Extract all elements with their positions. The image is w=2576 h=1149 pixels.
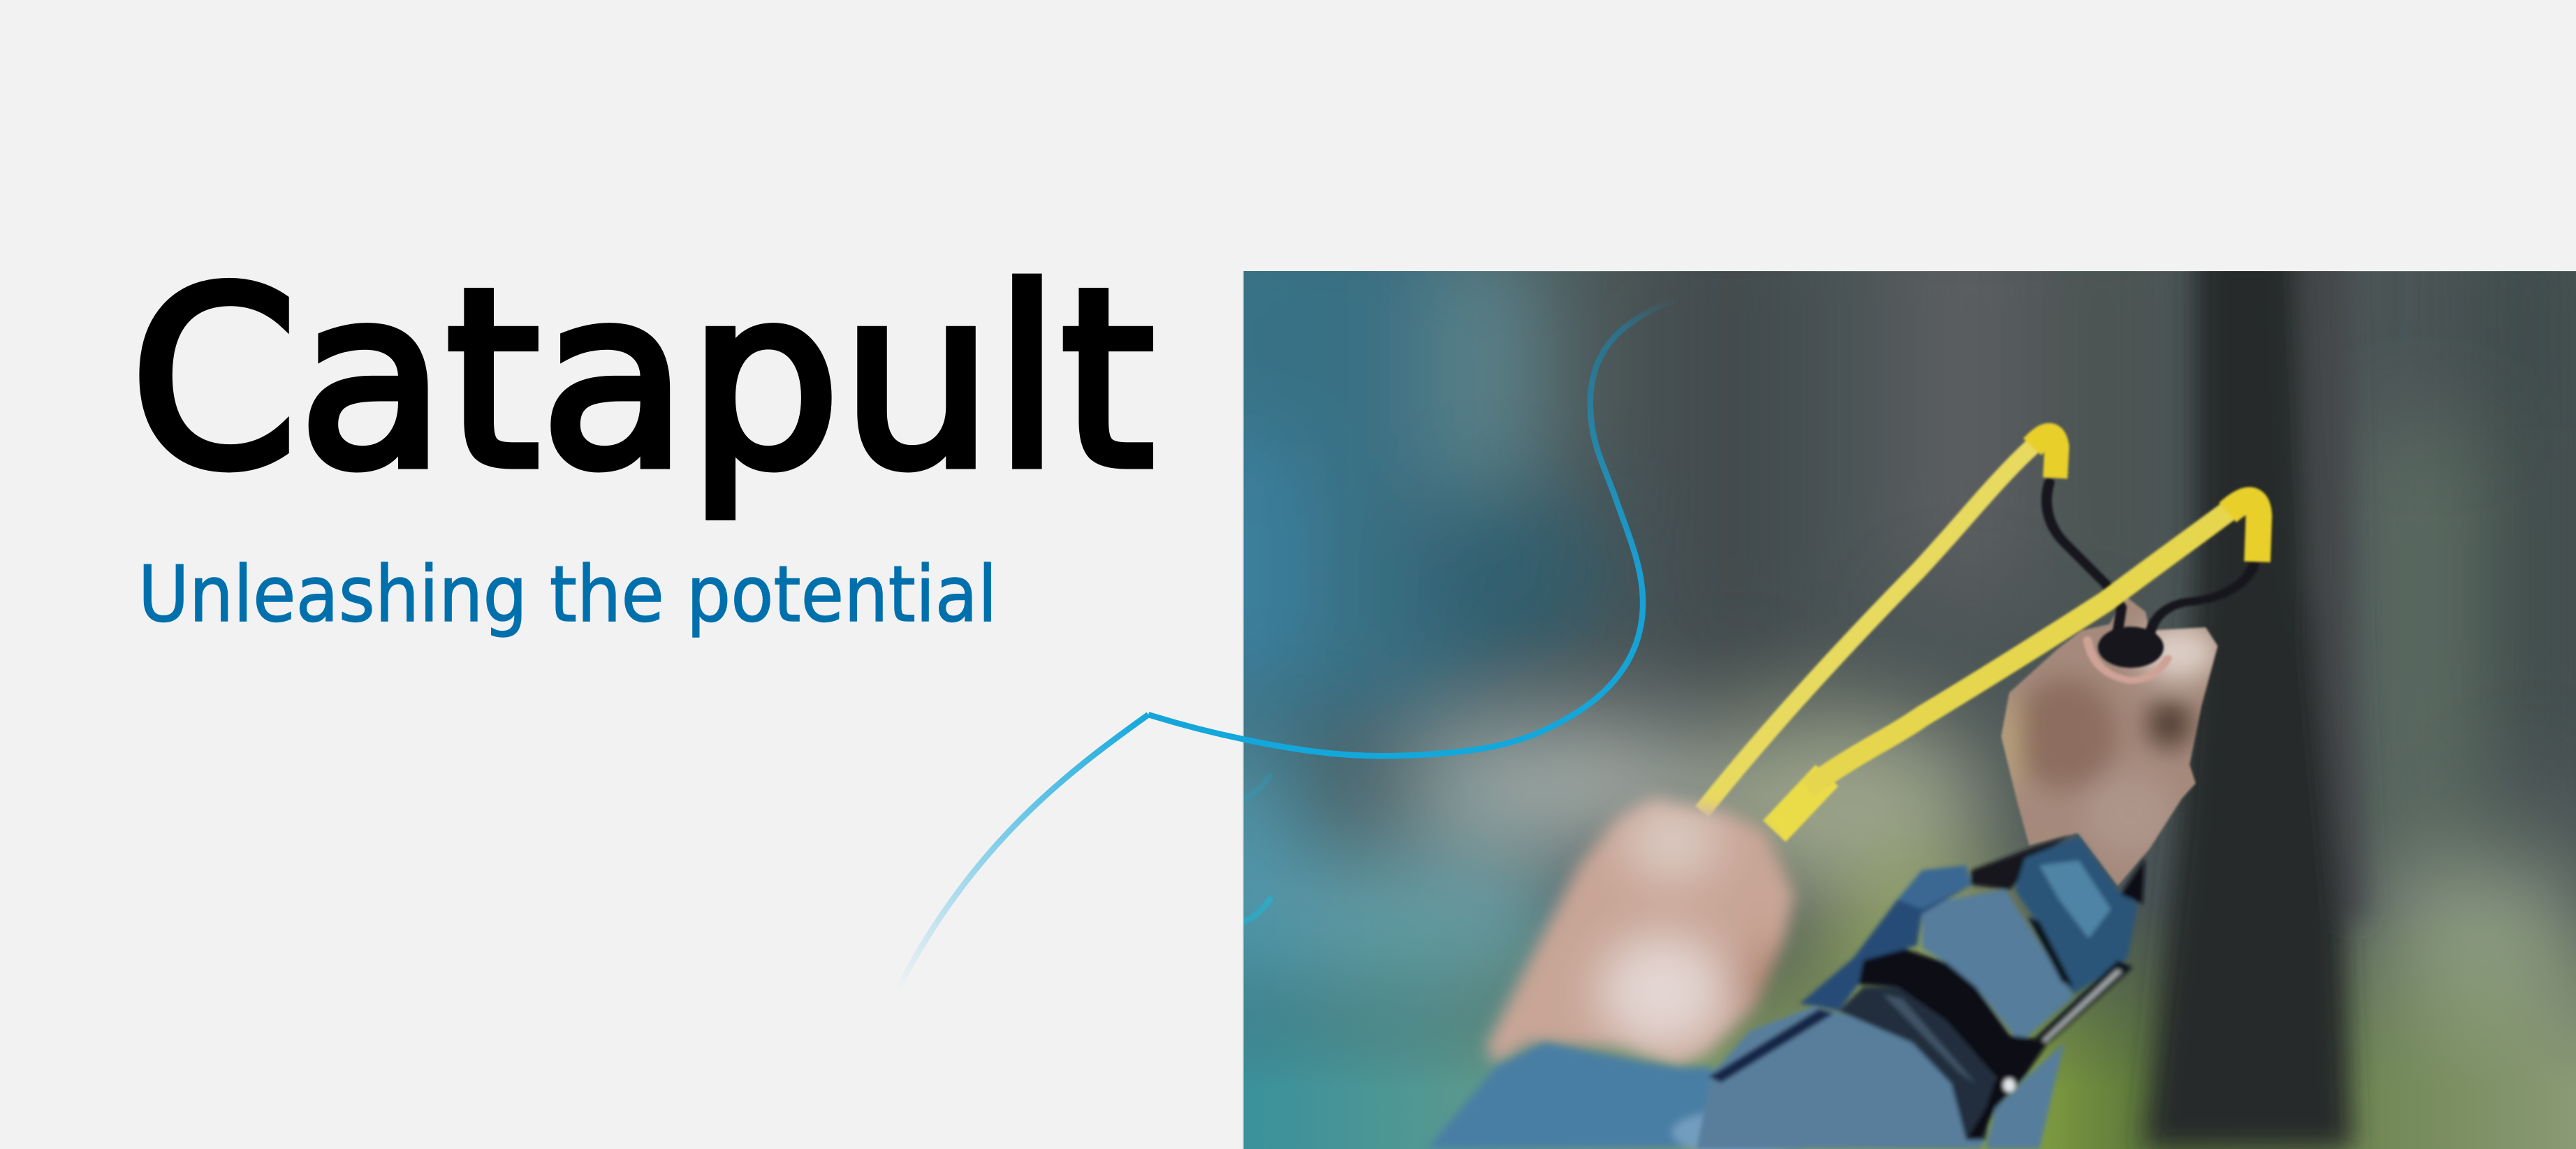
title: Catapult [130, 237, 1155, 524]
black band [1858, 948, 2015, 1077]
cuff edge panel [2015, 836, 2137, 994]
metal stud [2003, 1078, 2015, 1092]
fingers around pouch [2088, 640, 2167, 680]
outer cuff shadow panel [1799, 865, 1971, 1011]
left hand [1478, 790, 1803, 1069]
left forearm sleeve [1427, 1043, 1804, 1149]
slingshot pouch [2098, 627, 2164, 668]
cuff edge highlight [2040, 861, 2111, 938]
faint curve ghosts on photo edge [1241, 774, 1271, 923]
sleeve seam [1708, 1009, 1834, 1083]
photo: hands pulling a yellow slingshot [1243, 271, 2576, 1149]
lower strap [1966, 1035, 2049, 1140]
upper cuff panel [1922, 890, 2074, 1043]
slingshot yellow arms [1702, 435, 2259, 831]
lower sleeve panel [1986, 1043, 2064, 1149]
photo left edge [1243, 271, 1244, 1149]
right arm sleeve and cuff [1697, 836, 2145, 1149]
right hand [2000, 598, 2219, 887]
upper wrist strap [2121, 858, 2145, 905]
velcro band [1838, 987, 1996, 1140]
wrist strap [2030, 960, 2132, 1043]
velcro highlight [1883, 994, 1976, 1084]
cuff seam [2027, 916, 2074, 987]
metal strap highlight [2042, 969, 2122, 1042]
slingshot black elastic bands [2047, 483, 2254, 635]
top black strip [1971, 836, 2069, 890]
cuff highlight [1898, 865, 1971, 909]
infographic canvas [139, 271, 2576, 1149]
tree trunk [2144, 247, 2366, 1149]
subtitle: Unleashing the potential [138, 550, 997, 640]
curve: left fading arc [894, 715, 1148, 997]
forearm panel [1697, 1007, 1986, 1149]
curve: swoosh across photo [1148, 299, 1677, 756]
photo background: blurred forest [1243, 271, 2576, 1149]
